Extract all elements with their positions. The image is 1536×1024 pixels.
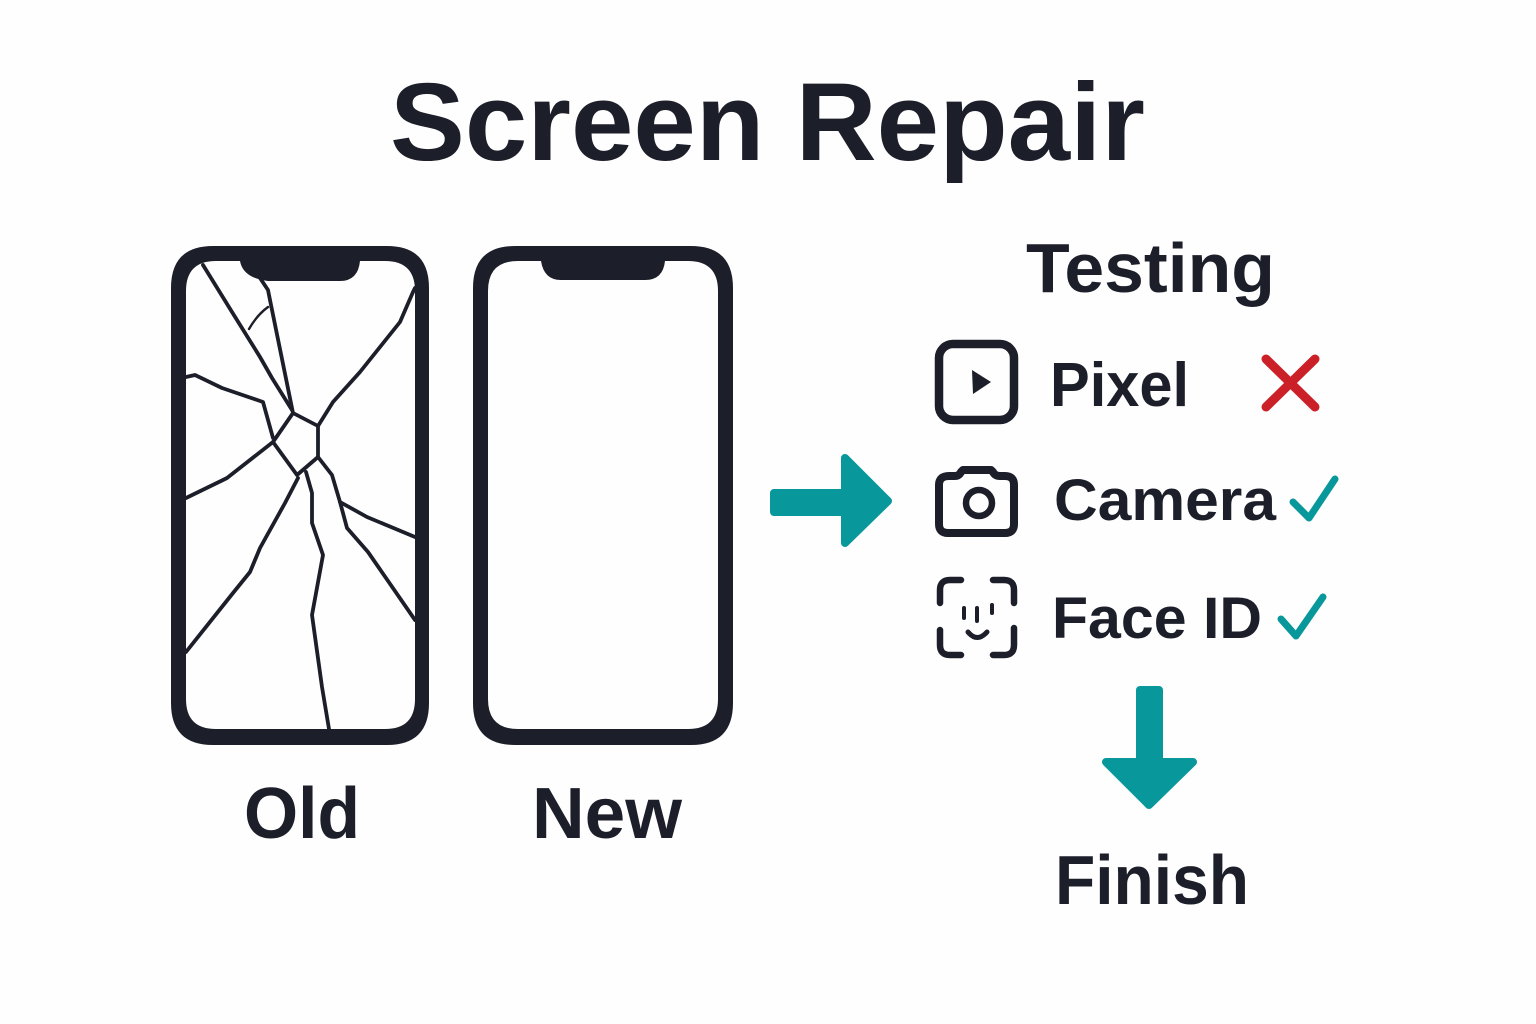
test row: pixel — [939, 344, 1315, 420]
arrow: right — [774, 458, 888, 543]
arrow: down — [1106, 690, 1193, 805]
test row: camera — [939, 468, 1335, 533]
screen cracks — [186, 265, 415, 729]
label: new: New — [532, 774, 683, 854]
label: pixel: Pixel — [1050, 351, 1189, 420]
title: Screen Repair — [390, 61, 1145, 184]
icon: camera — [939, 470, 1014, 533]
old phone with cracked screen — [171, 246, 429, 745]
new phone — [473, 246, 733, 745]
label: camera: Camera — [1054, 468, 1277, 533]
label: face id: Face ID — [1052, 586, 1262, 651]
icon: play square — [939, 344, 1014, 420]
icon: check — [1293, 479, 1335, 518]
test row: face id — [940, 580, 1323, 655]
label: old: Old — [244, 774, 360, 854]
icon: check — [1281, 597, 1323, 636]
label: finish: Finish — [1055, 841, 1249, 919]
phone body: old — [171, 246, 429, 745]
icon: face id — [940, 580, 1014, 655]
heading: testing: Testing — [1026, 229, 1275, 307]
icon: red cross — [1266, 359, 1315, 407]
